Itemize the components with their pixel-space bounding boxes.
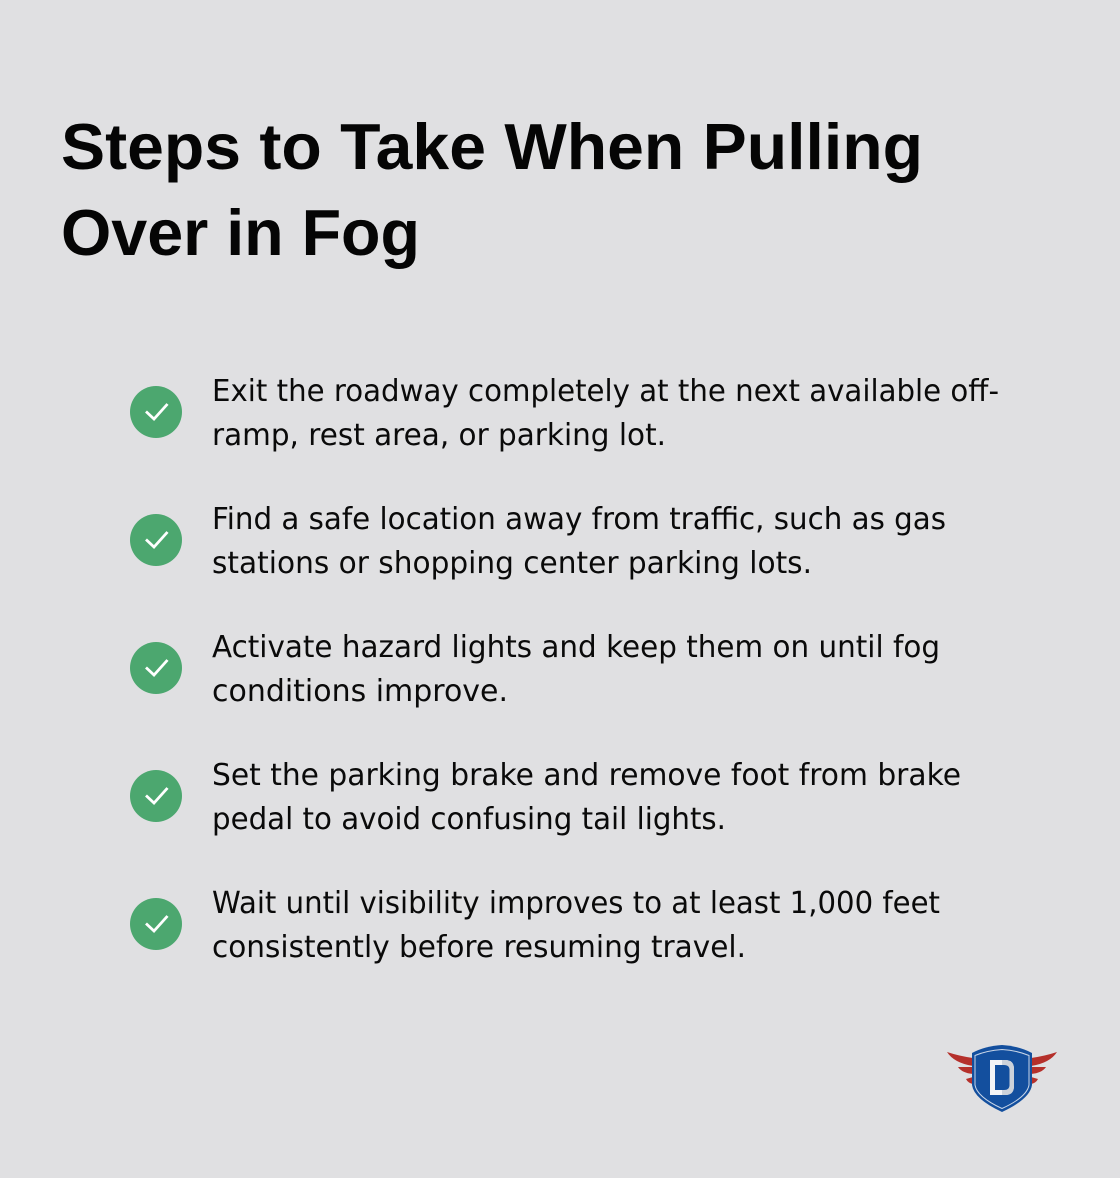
step 3: conditions improve. xyxy=(212,674,508,709)
step 3: Activate hazard lights and keep them on until fog xyxy=(212,630,940,665)
step 4 xyxy=(130,758,961,837)
title xyxy=(61,110,923,269)
step 4: pedal to avoid confusing tail lights. xyxy=(212,802,726,837)
step 5: Wait until visibility improves to at least 1,000 feet xyxy=(212,886,940,921)
title: Steps to Take When Pulling xyxy=(61,110,923,183)
step 2 xyxy=(130,502,946,581)
step 4: Set the parking brake and remove foot from brake xyxy=(212,758,961,793)
step 5: consistently before resuming travel. xyxy=(212,930,746,965)
title: Over in Fog xyxy=(61,196,420,269)
icon: shield logo with wings xyxy=(947,1045,1057,1112)
step 2: stations or shopping center parking lots. xyxy=(212,546,812,581)
step 1 xyxy=(130,374,999,453)
step 5 xyxy=(130,886,940,965)
step 1: Exit the roadway completely at the next available off- xyxy=(212,374,999,409)
step 2: Find a safe location away from traffic, such as gas xyxy=(212,502,946,537)
checklist xyxy=(130,374,999,965)
step 3 xyxy=(130,630,940,709)
step 1: ramp, rest area, or parking lot. xyxy=(212,418,666,453)
